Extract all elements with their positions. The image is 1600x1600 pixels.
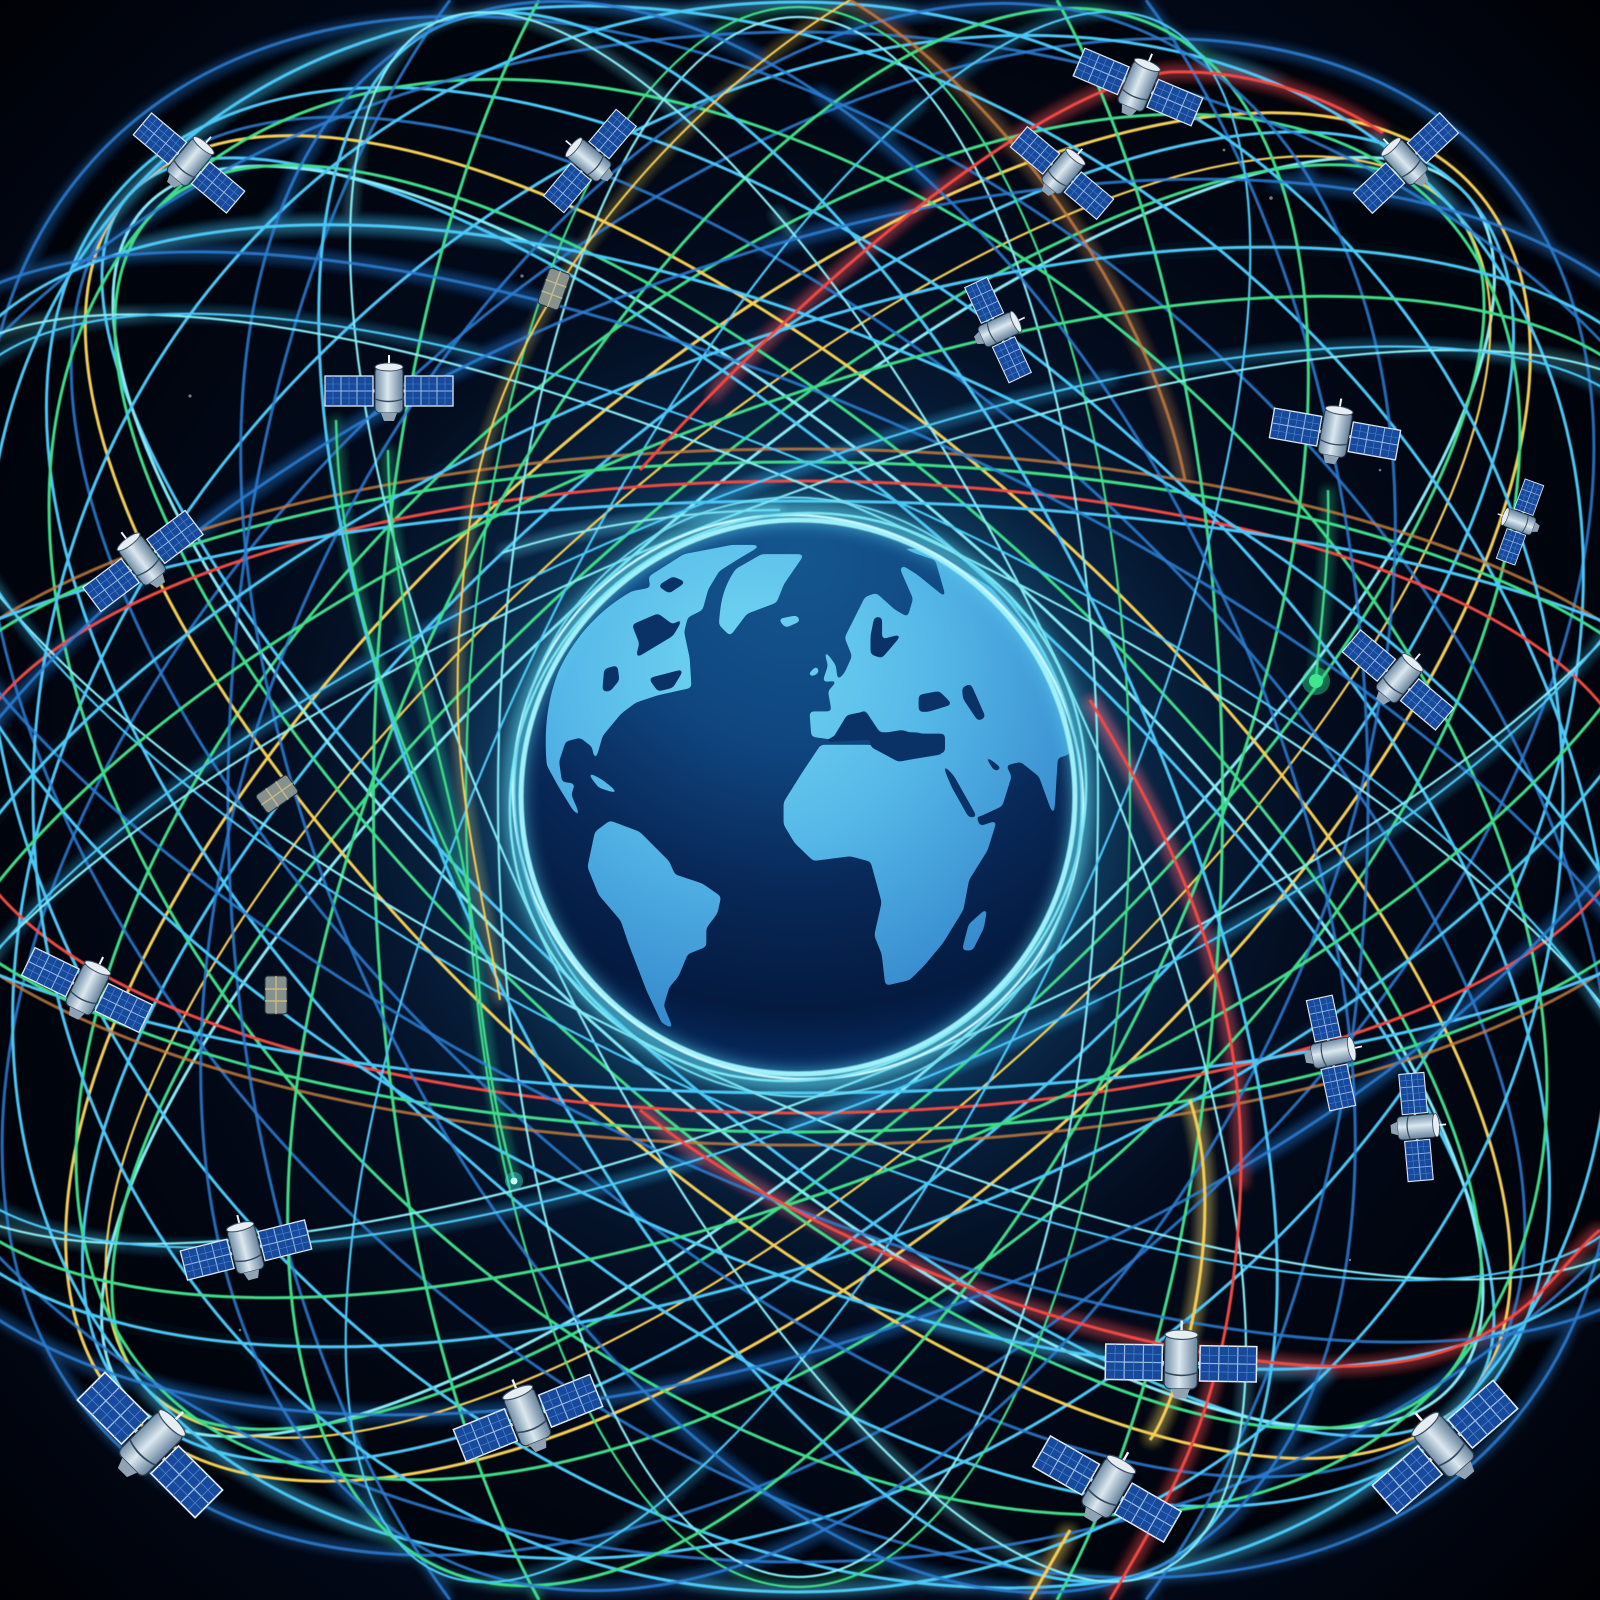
madagascar xyxy=(962,908,987,950)
satellite 19 xyxy=(1105,1319,1257,1400)
satellite 22 xyxy=(1355,1361,1530,1528)
satellite 21 xyxy=(444,1352,609,1478)
iceland xyxy=(778,615,800,628)
africa xyxy=(784,745,997,985)
greenland xyxy=(719,554,804,636)
satellite 9 xyxy=(1267,387,1404,475)
red orbit: right descending arc xyxy=(1090,700,1241,1600)
cuba xyxy=(586,771,621,795)
red orbit: top right descending xyxy=(850,0,1185,480)
satellite 4 xyxy=(1002,113,1126,229)
satellite 8 xyxy=(325,355,453,421)
blue glow behind globe xyxy=(258,257,1338,1337)
ocean sphere xyxy=(524,523,1072,1071)
satellite 10 xyxy=(70,494,212,623)
comet heads xyxy=(505,667,1330,1190)
satellite 2 xyxy=(530,97,646,221)
satellite 16 xyxy=(1293,991,1374,1114)
green comet trail right xyxy=(1316,490,1328,680)
uk xyxy=(823,647,837,682)
stars xyxy=(188,149,1381,1331)
satellite 7 xyxy=(954,270,1047,388)
green trail far left xyxy=(336,420,470,900)
satellite 23 xyxy=(1024,1414,1194,1557)
satellite 17 xyxy=(1386,1071,1451,1183)
yellow orbit: bottom right xyxy=(1030,1100,1205,1600)
satellite 1 xyxy=(124,98,258,224)
ireland xyxy=(808,665,819,676)
satellite 14 xyxy=(15,928,162,1046)
red orbit: lower arc xyxy=(640,1110,1600,1366)
green comet trail left xyxy=(388,450,514,1180)
satellite 18 xyxy=(175,1200,315,1295)
satellite 13 xyxy=(255,774,299,814)
continents xyxy=(546,545,1069,1035)
satellite 20 xyxy=(64,1353,242,1531)
white streak near globe xyxy=(502,510,780,553)
satellite 12 xyxy=(1333,615,1467,741)
north america xyxy=(546,545,762,828)
yellow orbit: top thin arc xyxy=(458,0,850,1000)
south america xyxy=(588,821,721,1035)
inland seas xyxy=(602,577,1002,817)
glowing ring glow xyxy=(514,513,1082,1081)
satellite 6 xyxy=(537,267,571,311)
satellite 3 xyxy=(1067,29,1211,140)
globe xyxy=(524,523,1072,1071)
satellite 5 xyxy=(1340,99,1468,223)
eurasia xyxy=(810,545,1069,817)
satellite 11 xyxy=(1483,474,1553,568)
glowing rings around globe xyxy=(398,400,1198,1194)
red orbit: upper right arc xyxy=(640,72,1383,470)
land masses xyxy=(546,545,1069,1035)
satellite 15 xyxy=(265,976,287,1014)
